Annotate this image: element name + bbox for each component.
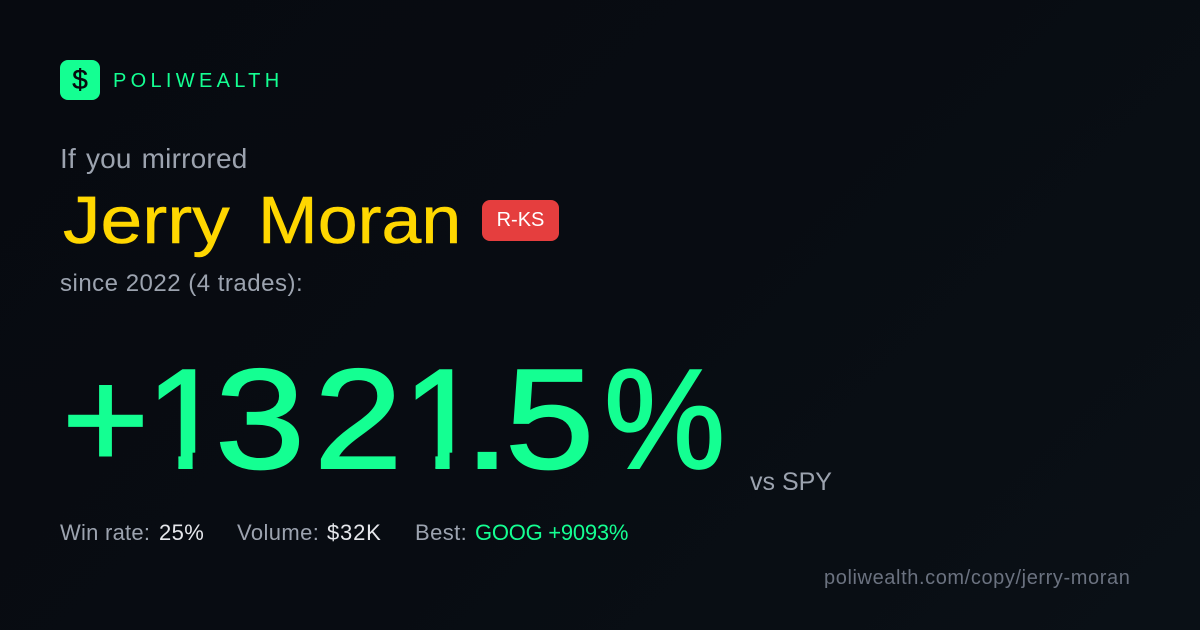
stat: win rate: Win rate: <box>60 520 150 545</box>
logo <box>60 60 283 100</box>
stat: volume <box>237 520 382 545</box>
since text: since 2022 (4 trades): <box>60 270 303 297</box>
politician name: Jerry <box>63 183 230 258</box>
icon: dollar badge <box>60 60 100 100</box>
party badge: R-KS <box>497 209 544 231</box>
politician name: Moran <box>258 183 461 258</box>
politician name <box>63 183 461 258</box>
intro text: If you mirrored <box>60 143 248 174</box>
main return figure: % <box>604 340 725 499</box>
brand name: POLIWEALTH <box>113 70 283 92</box>
benchmark label: vs SPY <box>750 468 832 496</box>
main return figure: 1 <box>146 340 225 499</box>
main return figure <box>62 340 725 499</box>
url: poliwealth.com/copy/jerry-moran <box>824 567 1130 589</box>
stats row <box>60 520 628 545</box>
main return figure: 5 <box>505 340 594 499</box>
stat: best trade: Best: <box>415 520 467 545</box>
stat: best trade: GOOG +9093% <box>475 520 628 545</box>
main return figure: 2 <box>314 340 402 499</box>
icon: dollar badge: $ <box>72 64 88 95</box>
stat: volume: Volume: <box>237 520 319 545</box>
main return figure: . <box>463 340 511 499</box>
stat: win rate <box>60 520 204 545</box>
party badge <box>482 200 559 241</box>
main return figure: + <box>62 340 149 499</box>
main return figure: 1 <box>403 340 482 499</box>
stat: win rate: 25% <box>159 520 204 545</box>
main return figure: 3 <box>215 340 305 499</box>
stat: volume: $32K <box>327 520 382 545</box>
